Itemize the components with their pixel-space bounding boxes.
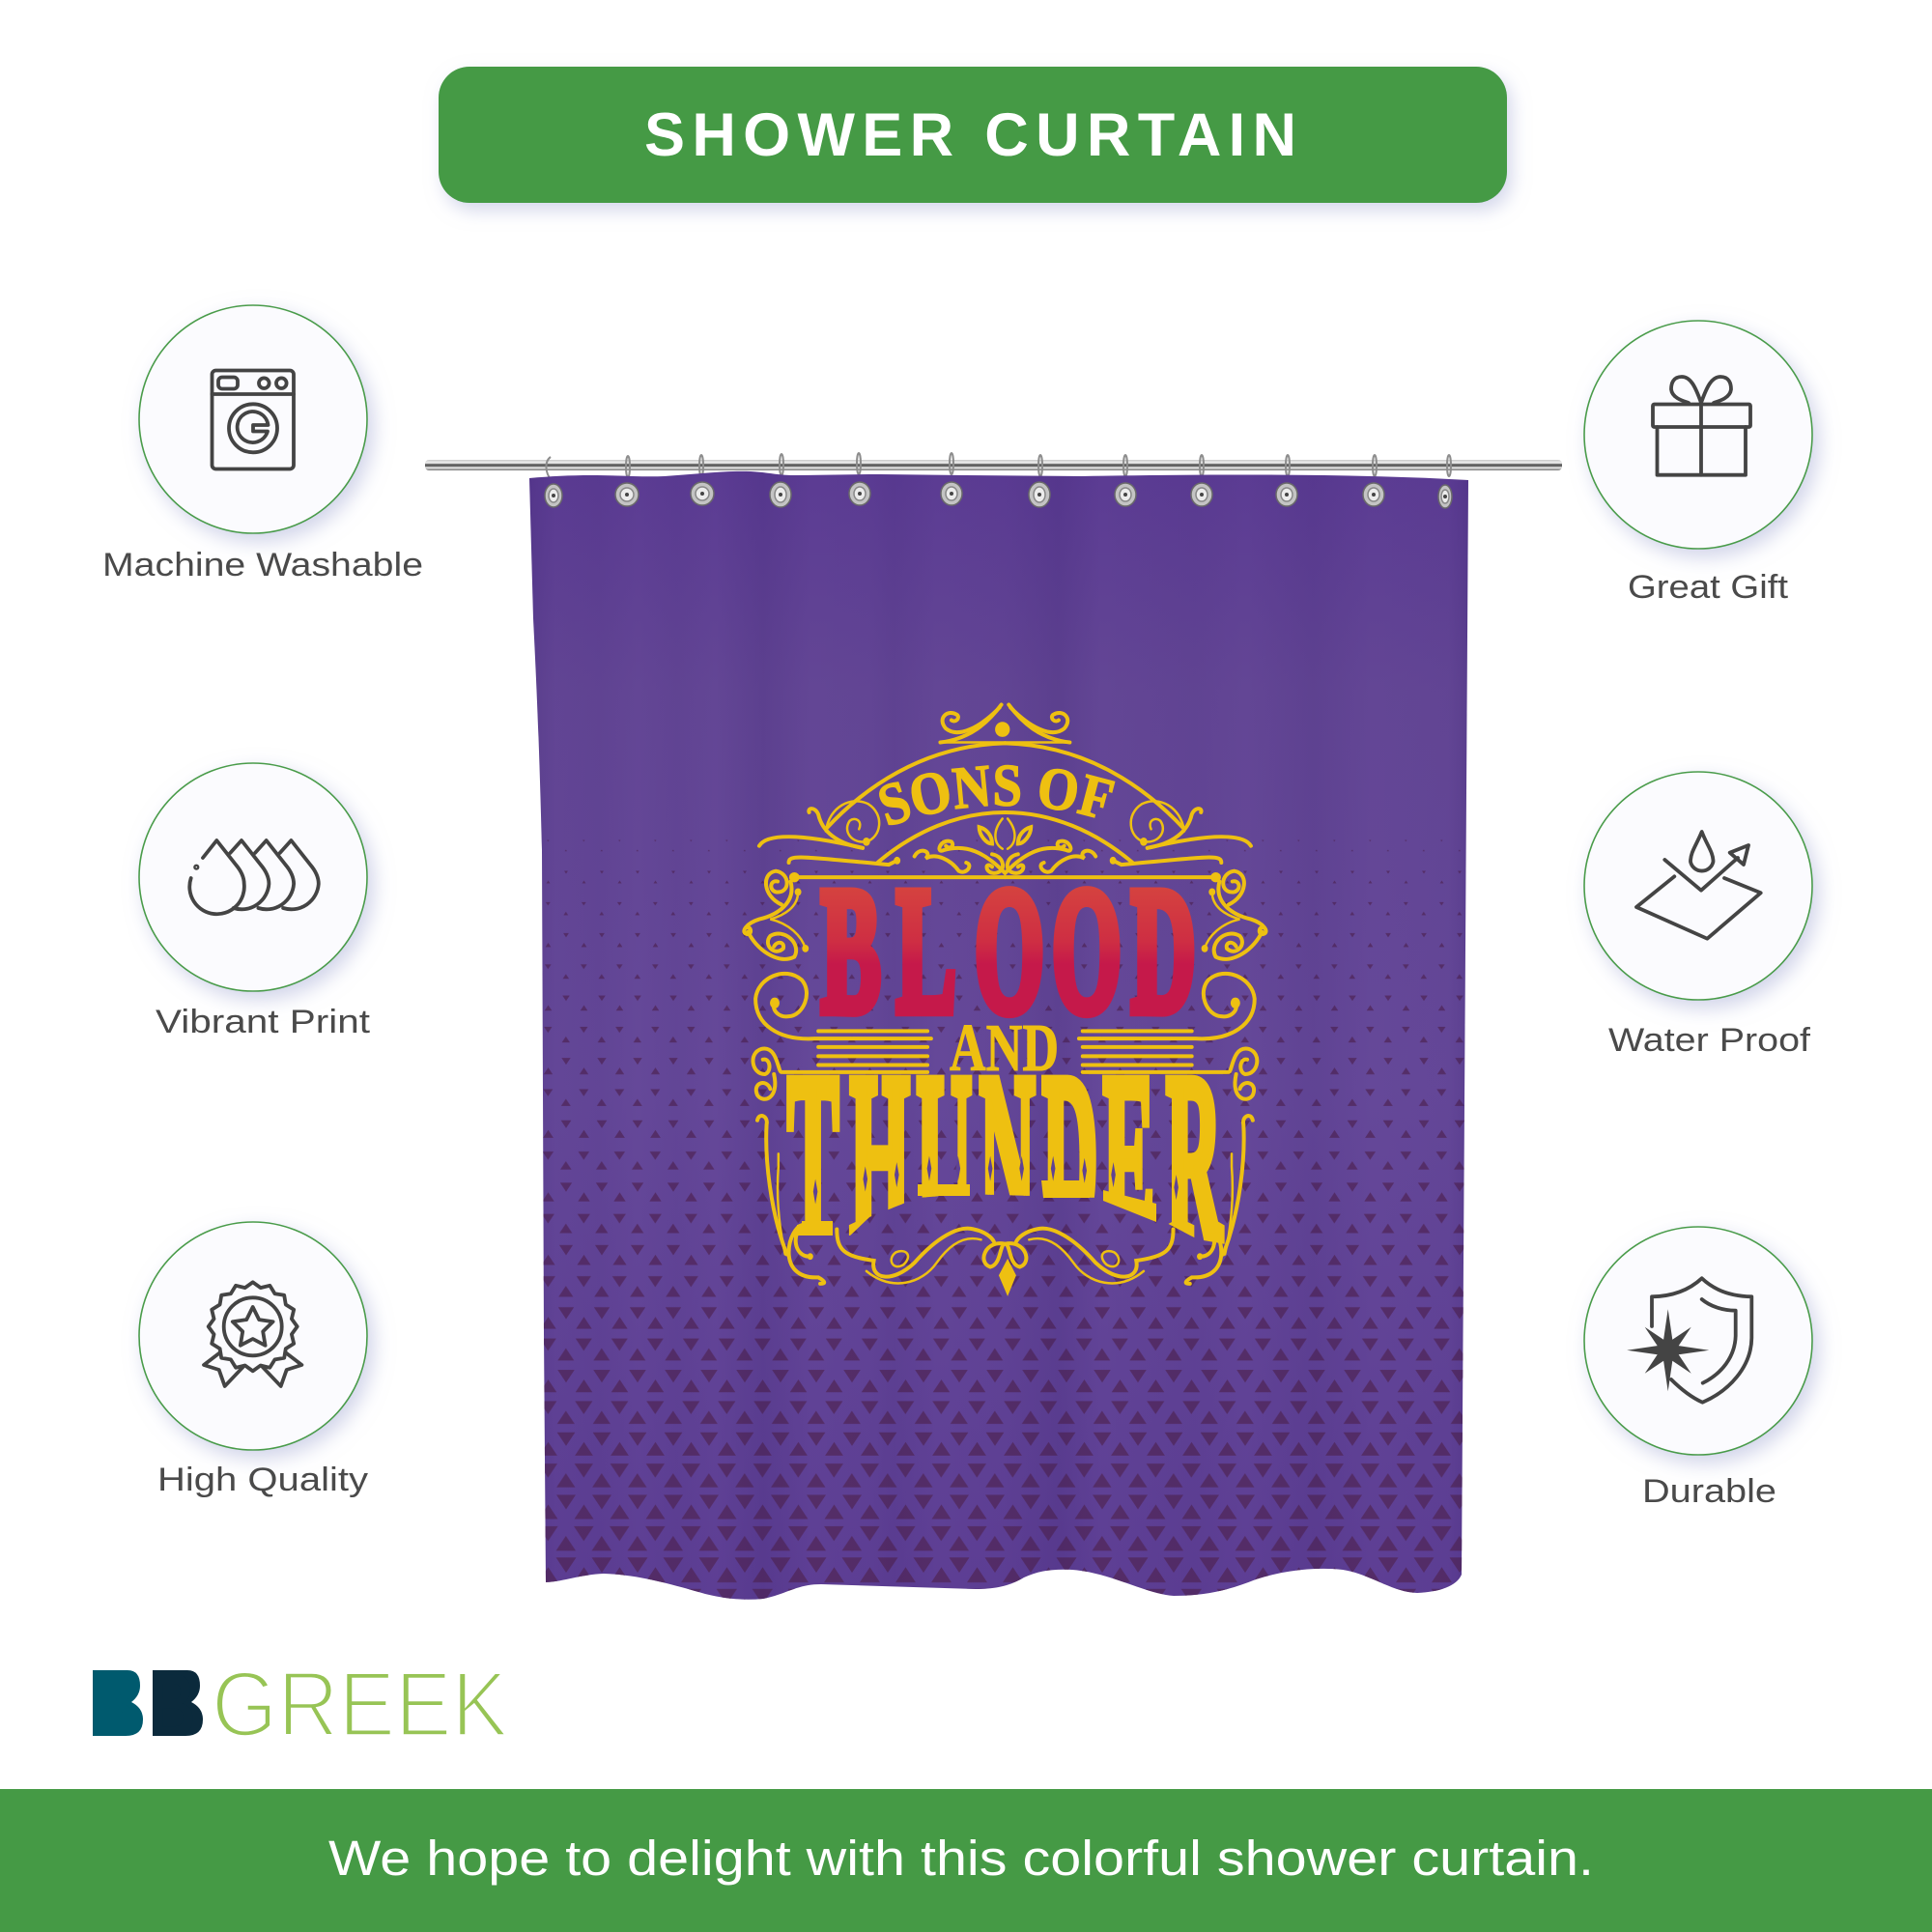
title banner bbox=[439, 67, 1507, 203]
icon: washing machine bbox=[213, 371, 294, 469]
text: sons of: SONS OF bbox=[879, 765, 1115, 825]
feature: machine washable bbox=[102, 305, 423, 583]
text: thunder: THUNDER bbox=[787, 1026, 1223, 1293]
label: durable: Durable bbox=[1642, 1473, 1776, 1510]
label: machine washable: Machine Washable bbox=[102, 547, 423, 583]
logo wordmark: GREEK: GREEK bbox=[212, 1653, 508, 1756]
icon: water repellent fabric bbox=[1636, 832, 1761, 939]
text: and: AND bbox=[950, 1011, 1059, 1086]
curtain fabric bbox=[522, 464, 1478, 1617]
logo mark: BB: B bbox=[89, 1656, 136, 1756]
ornamental frame bbox=[744, 704, 1266, 1296]
grommets bbox=[545, 482, 1452, 508]
label: great gift: Great Gift bbox=[1628, 569, 1789, 606]
icon: shield with burst bbox=[1627, 1278, 1751, 1403]
feature: high quality bbox=[139, 1222, 368, 1498]
thunder letter feet bbox=[802, 1180, 1156, 1236]
label: water proof: Water Proof bbox=[1608, 1022, 1811, 1059]
feature: vibrant print bbox=[139, 763, 371, 1040]
curtain hooks bbox=[546, 453, 1451, 479]
logo: BB Greek bbox=[89, 1653, 508, 1756]
feature: water proof bbox=[1584, 772, 1812, 1059]
feature: great gift bbox=[1584, 321, 1812, 606]
text: blood: BLOOD bbox=[821, 852, 1196, 1049]
fold shading bbox=[522, 464, 1478, 1604]
text: sons of bbox=[879, 765, 1115, 825]
footer text: We hope to delight with this colorful shower curtain. bbox=[328, 1831, 1594, 1886]
icon: four droplets bbox=[189, 840, 319, 914]
logo mark: BB: B bbox=[149, 1656, 195, 1756]
icon: gift box bbox=[1653, 377, 1750, 475]
footer banner bbox=[0, 1789, 1932, 1932]
logo mark: BB bbox=[89, 1656, 203, 1756]
label: vibrant print: Vibrant Print bbox=[156, 1004, 371, 1040]
feature: durable bbox=[1584, 1227, 1812, 1510]
triangle pattern bbox=[522, 830, 1478, 1617]
curtain artwork bbox=[742, 702, 1267, 1296]
label: high quality: High Quality bbox=[157, 1462, 368, 1498]
shower rod bbox=[425, 460, 1562, 470]
icon: award rosette bbox=[204, 1282, 301, 1386]
title text: SHOWER CURTAIN bbox=[644, 101, 1296, 169]
thunder diamond cut-outs bbox=[813, 1156, 1179, 1204]
